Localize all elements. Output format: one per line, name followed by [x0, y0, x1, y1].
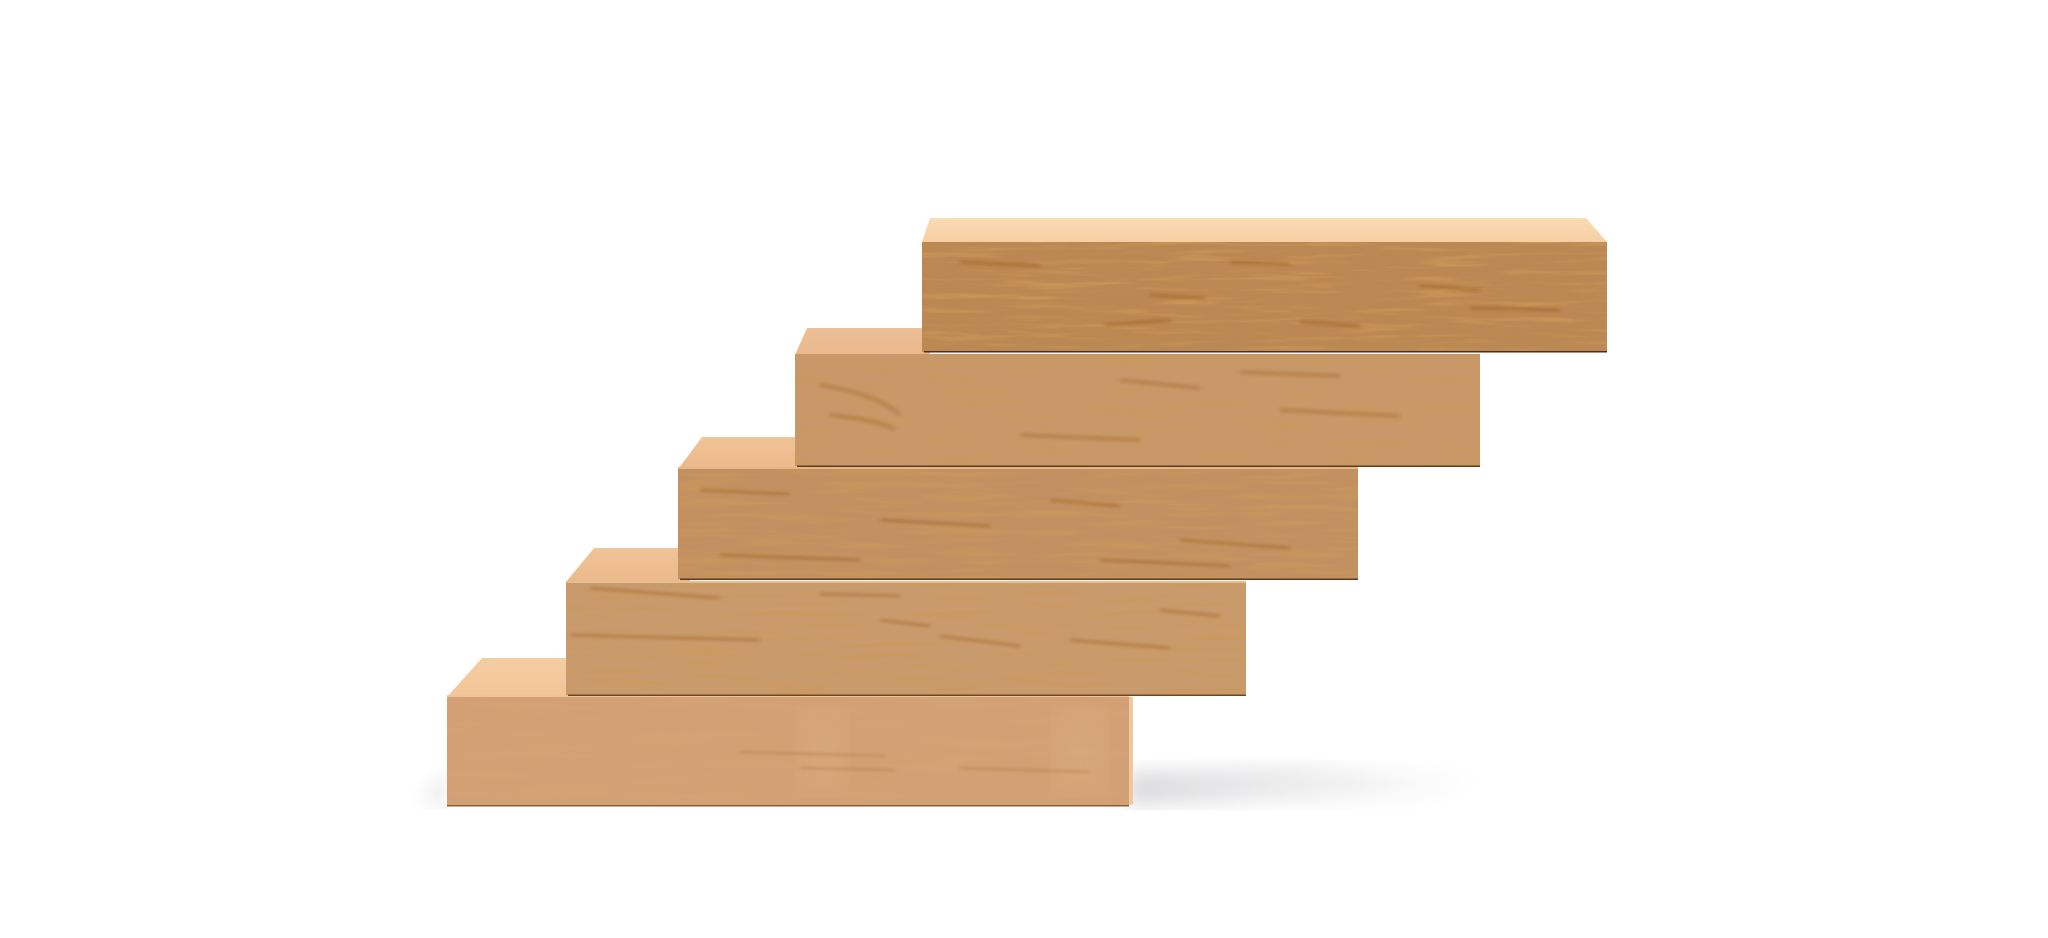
cast shadow on the right of the stack	[1128, 764, 1510, 806]
block 2	[795, 328, 1480, 467]
block 5: bottom block	[447, 658, 1133, 806]
block 1: top block	[922, 218, 1607, 352]
block 3	[678, 437, 1358, 580]
cast shadow on the left of the stack	[408, 772, 447, 806]
block 4	[566, 548, 1246, 696]
